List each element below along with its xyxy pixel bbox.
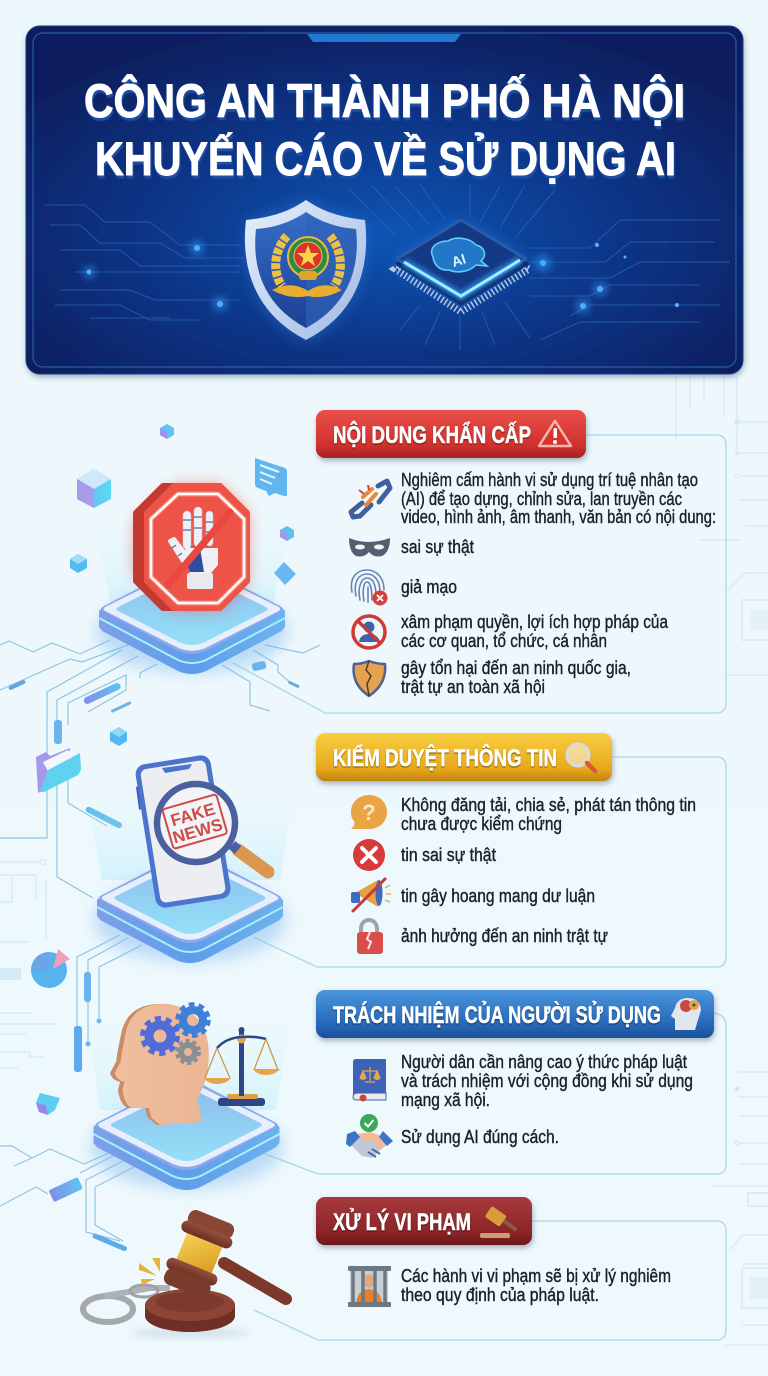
icon: broken chain <box>351 481 390 517</box>
light beam 1 <box>92 512 292 610</box>
icon: question bubble: ? <box>362 800 376 825</box>
small cube 2 <box>110 727 127 746</box>
icon: folder <box>36 748 81 793</box>
gear gray <box>177 1041 199 1063</box>
background circuit pattern left <box>0 640 320 1252</box>
icon: gavel and handcuffs <box>83 1207 286 1338</box>
text: rights violation <box>401 612 669 651</box>
text: awareness <box>401 1052 693 1110</box>
header badge: urgent: NỘI DUNG KHẨN CẤP <box>333 421 531 449</box>
text: do not share: chưa được kiểm chứng <box>401 814 562 834</box>
icon: broken lock <box>357 920 383 954</box>
text: gia mao: giả mạo <box>401 577 457 597</box>
platform 3 <box>90 1078 282 1190</box>
robot hand <box>168 507 230 589</box>
light beam 2 <box>84 784 294 880</box>
connector lines and panel 4 outline <box>254 1221 726 1340</box>
icon: police shield <box>245 200 366 340</box>
icon: AI chip <box>395 220 529 312</box>
banner circuit lines <box>45 184 730 350</box>
icon: muted megaphone <box>351 879 391 911</box>
title <box>84 74 685 185</box>
small cube left <box>70 554 87 573</box>
icon: scales of justice <box>204 1027 280 1106</box>
text: intro urgent <box>401 470 716 527</box>
title: KHUYẾN CÁO VỀ SỬ DỤNG AI <box>95 132 676 185</box>
sparks <box>139 1258 160 1285</box>
header badge: urgent <box>316 410 586 458</box>
text: awareness: và trách nhiệm với cộng đồng khi sử dụng <box>401 1071 693 1091</box>
text: proper AI use: Sử dụng AI đúng cách. <box>401 1127 559 1147</box>
cube top <box>160 424 174 439</box>
hero banner <box>26 26 743 374</box>
text: do not share <box>401 795 696 834</box>
icon: stop sign robot hand <box>136 486 247 608</box>
text: strict handling <box>401 1266 671 1305</box>
text: panic news: tin gây hoang mang dư luận <box>401 886 595 906</box>
text: security impact: ảnh hưởng đến an ninh trật tự <box>401 926 608 946</box>
text: national security: gây tổn hại đến an ninh quốc gia, <box>401 658 631 678</box>
icon: small gavel <box>480 1206 515 1238</box>
text: do not share: Không đăng tải, chia sẻ, phát tán thông tin <box>401 795 696 815</box>
icon: head small <box>671 998 701 1030</box>
header badge: responsibility <box>316 990 714 1038</box>
magnifier <box>157 784 268 872</box>
text: rights violation: xâm phạm quyền, lợi ích hợp pháp của <box>401 612 669 632</box>
hero inner frame <box>33 33 736 367</box>
small cube 3 <box>36 1093 60 1115</box>
fake news stamp: FAKE <box>169 799 217 830</box>
text: intro urgent: Nghiêm cấm hành vi sử dụng trí tuệ nhân tạo <box>401 470 698 490</box>
banner top tab <box>307 34 461 42</box>
icon: question bubble <box>351 795 387 829</box>
icon: head with gears <box>110 1004 209 1125</box>
text: national security <box>401 658 631 697</box>
text: false news: tin sai sự thật <box>401 845 496 865</box>
fake news stamp: NEWS <box>170 815 225 847</box>
light beam 3 <box>86 1010 292 1110</box>
text: rights violation: các cơ quan, tổ chức, cá nhân <box>401 631 607 651</box>
platform 1 <box>96 562 288 674</box>
gear blue large <box>143 1019 177 1053</box>
text: awareness: Người dân cần nâng cao ý thức pháp luật <box>401 1052 687 1072</box>
background circuit pattern right <box>676 376 768 1345</box>
icon: warning triangle <box>539 421 571 446</box>
gavel base <box>145 1290 235 1332</box>
text: sai su that: sai sự thật <box>401 537 474 557</box>
small cube right <box>280 526 294 541</box>
icon: red x circle <box>353 839 385 871</box>
icon: handshake with check <box>346 1114 393 1158</box>
text: strict handling: theo quy định của pháp luật. <box>401 1285 599 1305</box>
gavel handle <box>224 1263 286 1299</box>
icon: law book <box>353 1059 386 1102</box>
header badge: responsibility: TRÁCH NHIỆM CỦA NGƯỜI SỬ DỤNG <box>333 1000 661 1029</box>
header badge: moderation: KIỂM DUYỆT THÔNG TIN <box>333 744 557 772</box>
text: national security: trật tự an toàn xã hội <box>401 677 545 697</box>
platform 2 <box>94 852 286 963</box>
header badge: violation handling <box>316 1197 532 1245</box>
fake news stamp <box>162 794 227 849</box>
handcuffs <box>83 1285 170 1322</box>
gem <box>274 562 296 585</box>
connector lines and panel 2 outline <box>253 757 726 967</box>
icon: mask <box>349 538 390 556</box>
icon: magnifier gold <box>567 744 595 771</box>
text: intro urgent: (AI) để tạo dựng, chỉnh sửa, lan truyền các <box>401 489 682 509</box>
icon: prohibited person <box>353 616 385 648</box>
title: CÔNG AN THÀNH PHỐ HÀ NỘI <box>84 74 685 127</box>
connector lines and panel 1 outline <box>233 435 726 713</box>
gear blue small <box>178 1005 208 1035</box>
header badge: moderation <box>316 733 612 781</box>
gavel head <box>159 1207 239 1301</box>
icon: AI brain: AI <box>450 250 468 270</box>
pie chart <box>31 949 70 988</box>
icon: phone with fake news magnifier <box>134 754 268 909</box>
police emblem <box>272 236 342 297</box>
icon: fingerprint <box>351 570 388 606</box>
floating cubes group 1 <box>70 424 296 585</box>
chat bubble <box>255 458 287 496</box>
icon: jail prisoner <box>348 1266 391 1307</box>
header badge: violation handling: XỬ LÝ VI PHẠM <box>333 1207 471 1236</box>
text: strict handling: Các hành vi vi phạm sẽ bị xử lý nghiêm <box>401 1266 671 1286</box>
icon: cracked shield <box>354 661 385 696</box>
text: awareness: mạng xã hội. <box>401 1090 490 1110</box>
connector lines and panel 3 outline <box>260 1013 726 1174</box>
cube large <box>77 469 111 508</box>
